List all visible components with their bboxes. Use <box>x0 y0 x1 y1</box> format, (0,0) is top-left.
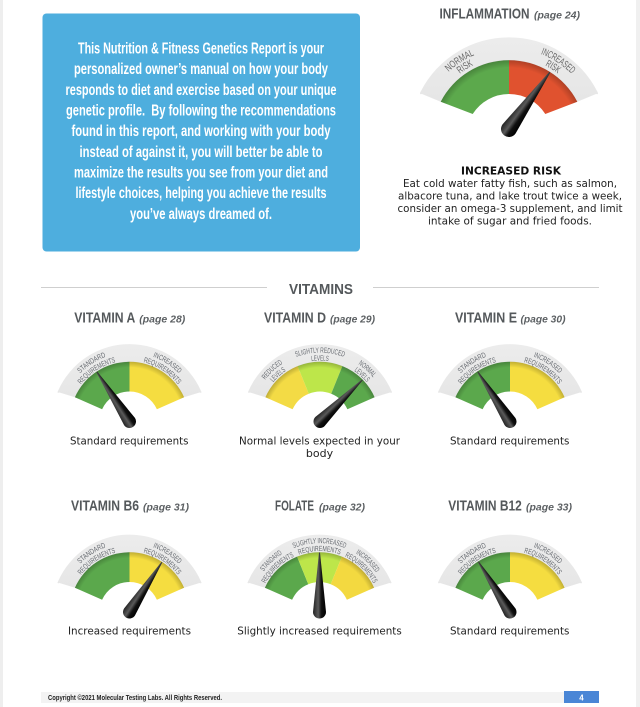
intro text: This Nutrition & Fitness Genetics Report is your <box>78 40 324 58</box>
gauge: inflammation: INCREASED <box>541 48 576 73</box>
gauge: inflammation: NORMAL <box>444 50 474 72</box>
heading: folate <box>275 498 365 514</box>
gauge: vitamin D: REDUCED <box>261 360 282 380</box>
gauge: vitamin D: NORMAL <box>358 360 376 378</box>
heading: folate: (page 32) <box>319 502 365 514</box>
page number <box>564 691 599 703</box>
gauge: vitamin D: LEVELS <box>270 367 286 382</box>
gauge: folate: REQUIREMENTS <box>345 552 378 583</box>
gauge: inflammation: RISK <box>456 59 474 74</box>
gauge: vitamin B12: REQUIREMENTS <box>524 548 562 574</box>
result: vitamin D: Normal levels expected in your <box>239 434 400 447</box>
gauge: folate: STANDARD <box>260 550 282 571</box>
intro text: personalized owner’s manual on how your body <box>74 61 328 78</box>
intro text: lifestyle choices, helping you achieve the results <box>76 185 327 202</box>
gauge: vitamin E: REQUIREMENTS <box>458 357 496 384</box>
heading: vitamin E: VITAMIN E <box>455 310 517 327</box>
gauge: vitamin B12: REQUIREMENTS <box>458 548 496 575</box>
panel: vitamin B6 <box>58 498 202 637</box>
gauge: folate: REQUIREMENTS <box>261 552 294 584</box>
intro text: instead of against it, you will better be able to <box>80 144 323 161</box>
heading: vitamin D: VITAMIN D <box>264 310 326 327</box>
gauge: inflammation <box>420 38 598 137</box>
gauge: vitamin B6: REQUIREMENTS <box>144 548 182 574</box>
footer <box>41 691 599 703</box>
gauge: vitamin A: INCREASED <box>154 352 182 372</box>
result: vitamin B6: Increased requirements <box>68 624 191 637</box>
gauge: vitamin B12 <box>438 534 582 618</box>
gauge: vitamin B6: STANDARD <box>77 543 105 564</box>
recommendation text <box>398 165 623 227</box>
recommendation text: intake of sugar and fried foods. <box>428 214 592 227</box>
heading: vitamin E: (page 30) <box>520 314 566 326</box>
gauge: vitamin A: REQUIREMENTS <box>144 357 182 384</box>
heading: folate: FOLATE <box>275 498 314 514</box>
gauge: vitamin E: STANDARD <box>458 352 486 373</box>
heading: inflammation: INFLAMMATION <box>440 6 530 22</box>
heading: vitamin E <box>455 310 566 327</box>
gauge: vitamin E: REQUIREMENTS <box>524 357 562 384</box>
gauge: vitamin E: INCREASED <box>534 352 562 372</box>
panel: folate <box>237 498 402 637</box>
panel: inflammation <box>398 6 623 227</box>
gauge: folate: INCREASED <box>356 549 380 572</box>
gauge: folate: SLIGHTLY INCREASED <box>292 538 346 548</box>
panel: vitamin E <box>438 310 582 447</box>
intro text: genetic profile. By following the recommendations <box>66 102 336 120</box>
gauge: vitamin D <box>248 344 392 428</box>
gauge: vitamin B6 <box>58 534 202 618</box>
recommendation text: Eat cold water fatty fish, such as salmon, <box>403 177 617 190</box>
gauge: vitamin B6: INCREASED <box>154 542 182 563</box>
panel: vitamin B12 <box>438 498 582 637</box>
gauge: vitamin D: LEVELS <box>354 366 370 382</box>
intro text: found in this report, and working with your body <box>72 123 331 140</box>
page number: 4 <box>579 694 584 702</box>
recommendation text: albacore tuna, and lake trout twice a week, <box>398 190 622 202</box>
panel: vitamin A <box>58 310 202 447</box>
heading: vitamin A: (page 28) <box>139 314 186 326</box>
page edge shading <box>0 0 3 707</box>
gauge: vitamin A: REQUIREMENTS <box>77 357 116 384</box>
gauge: vitamin B12: STANDARD <box>458 543 486 564</box>
heading: vitamin B6: (page 31) <box>143 502 189 514</box>
gauge: folate: REQUIREMENTS <box>298 546 341 554</box>
gauge: inflammation: RISK <box>546 60 562 74</box>
gauge: folate <box>248 534 392 618</box>
panel: vitamin D <box>239 310 400 460</box>
intro text <box>66 40 337 223</box>
gauge: vitamin E <box>438 344 582 428</box>
gauge: vitamin B6: REQUIREMENTS <box>77 548 116 575</box>
recommendation text: INCREASED RISK <box>461 165 561 178</box>
result: vitamin B12: Standard requirements <box>450 624 570 637</box>
gauge: vitamin A: STANDARD <box>77 352 105 373</box>
heading: vitamin B6: VITAMIN B6 <box>71 498 139 514</box>
recommendation text: consider an omega-3 supplement, and limit <box>398 202 623 215</box>
section heading: vitamins: VITAMINS <box>289 281 353 298</box>
heading: vitamin A <box>74 310 186 327</box>
heading: vitamin D: (page 29) <box>330 314 375 326</box>
gauge: vitamin D: SLIGHTLY REDUCED <box>295 348 345 356</box>
heading: vitamin B12: (page 33) <box>526 502 572 514</box>
copyright: Copyright ©2021 Molecular Testing Labs. All Rights Reserved. <box>48 693 222 702</box>
intro text: you’ve always dreamed of. <box>130 206 272 223</box>
heading: vitamin B12: VITAMIN B12 <box>448 498 522 514</box>
result: vitamin D <box>239 434 400 460</box>
result: vitamin A: Standard requirements <box>70 434 189 447</box>
heading: vitamin D <box>264 310 375 327</box>
heading: vitamin A: VITAMIN A <box>74 310 135 327</box>
result: folate: Slightly increased requirements <box>237 624 402 637</box>
panel: introduction <box>42 14 360 252</box>
result: vitamin D: body <box>306 447 334 460</box>
intro text: maximize the results you see from your diet and <box>74 164 328 182</box>
gauge: vitamin D: LEVELS <box>311 355 329 362</box>
result: vitamin E: Standard requirements <box>450 434 570 447</box>
gauge: vitamin A <box>58 344 202 428</box>
heading: inflammation: (page 24) <box>534 10 580 22</box>
intro text: responds to diet and exercise based on your unique <box>66 82 337 99</box>
gauge: vitamin B12: INCREASED <box>534 542 562 563</box>
